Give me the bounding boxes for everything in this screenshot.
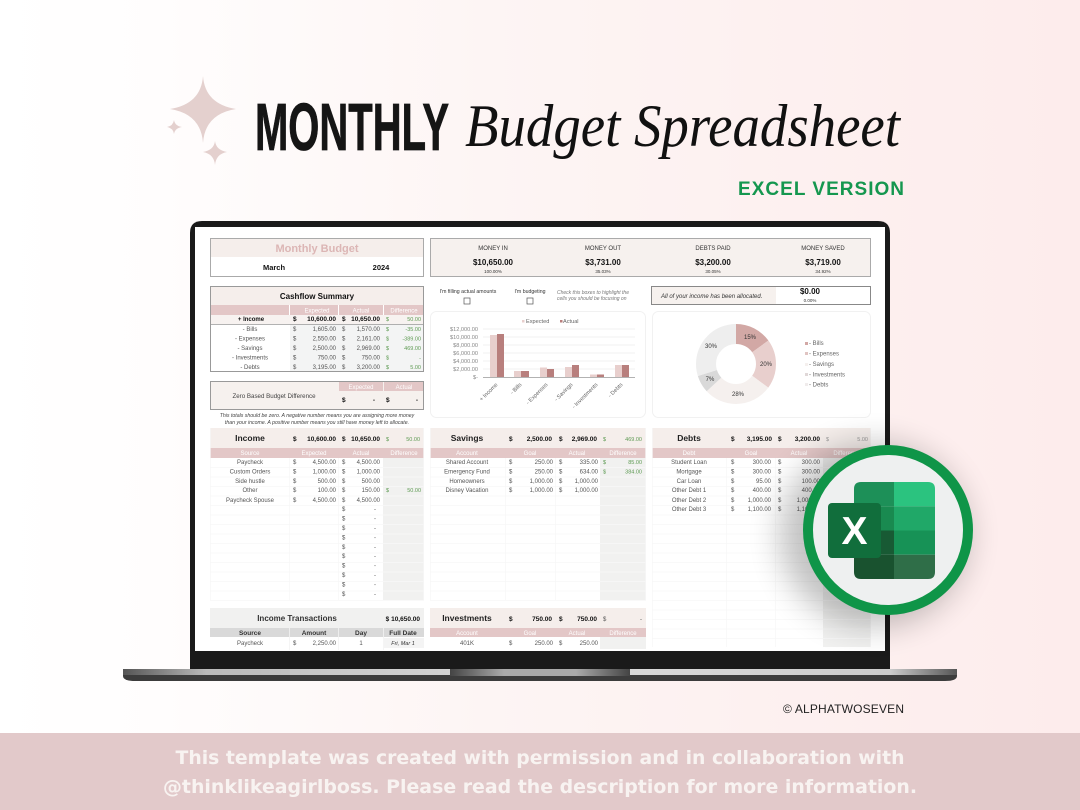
panel: cashflow summary: $: [386, 336, 389, 342]
panel: income: Paycheck Spouse: [226, 498, 275, 504]
panel: debts: $: [731, 488, 735, 494]
panel: savings: Actual: [569, 451, 585, 457]
panel: income: $: [342, 573, 346, 579]
panel: savings: Shared Account: [446, 460, 489, 466]
panel: view toggles: Check this boxes to highlight the: [557, 290, 629, 296]
panel: cashflow summary: $: [386, 365, 389, 371]
panel: income transactions: $ 10,650.00: [386, 616, 420, 623]
panel: debts: $: [778, 507, 782, 513]
copyright credit: © ALPHATWOSEVEN: [783, 702, 904, 716]
panel: debts: 1,000.00: [748, 498, 772, 504]
laptop bezel: [190, 221, 890, 670]
panel: savings: Disney Vacation: [446, 488, 488, 494]
panel: income: 4,500.00: [357, 460, 381, 466]
panel: cashflow summary: $: [386, 317, 389, 323]
panel: debts: $: [778, 460, 782, 466]
panel: debts: Difference: [833, 451, 861, 457]
panel: savings: 85.00: [628, 460, 642, 466]
panel: savings: 634.00: [580, 470, 599, 476]
panel: KPI summary: 34.92%: [815, 269, 831, 274]
panel: savings: 1,000.00: [575, 479, 599, 485]
bar chart: expected vs actual: - Investments: [571, 382, 600, 410]
laptop: [123, 221, 957, 681]
panel: savings: [430, 428, 646, 600]
panel: income: 500.00: [362, 479, 381, 485]
panel: income: $: [342, 507, 346, 513]
panel: income: -: [374, 507, 376, 513]
panel: investments: $: [603, 617, 607, 623]
panel: income: Actual: [353, 451, 369, 457]
panel: savings: Difference: [609, 451, 637, 457]
panel: cashflow summary: $: [293, 336, 297, 342]
panel: cashflow summary: Expected: [304, 308, 330, 314]
panel: cashflow summary: 1,570.00: [357, 327, 381, 333]
panel: zero based budget difference: -: [416, 397, 418, 404]
panel: month header: March: [263, 263, 285, 272]
bar chart: expected vs actual: - Debts: [607, 382, 625, 399]
panel: KPI summary: $3,719.00: [805, 258, 841, 267]
panel: cashflow summary: $: [342, 346, 346, 352]
panel: income: 10,650.00: [351, 436, 380, 443]
panel: income: 4,500.00: [357, 498, 381, 504]
panel: income transactions: Full Date: [389, 630, 417, 637]
panel: debts: $: [778, 470, 782, 476]
panel: income transactions: [210, 608, 424, 650]
panel: savings: 2,500.00: [527, 436, 552, 443]
panel: debts: 1,100.00: [748, 507, 772, 513]
panel: income transactions: Source: [239, 630, 261, 637]
panel: cashflow summary: $: [293, 316, 297, 323]
panel: month header: Monthly Budget: [275, 243, 359, 255]
panel: income: 1,000.00: [357, 470, 381, 476]
panel: debts: 400.00: [753, 488, 772, 494]
panel: zero based budget difference: Zero Based Budget Difference: [232, 393, 316, 400]
panel: income: Source: [240, 451, 260, 457]
footer band: This template was created with permission and in collaboration with: [176, 747, 904, 769]
subtitle: excel version: EXCEL VERSION: [738, 179, 904, 200]
panel: income: [210, 428, 424, 600]
bar chart: expected vs actual: $-: [473, 375, 478, 381]
panel: income: $: [386, 437, 389, 443]
panel: income: $: [293, 488, 297, 494]
panel: view toggles: cells you should be focusing on: [557, 296, 627, 302]
panel: KPI summary: $3,200.00: [695, 258, 731, 267]
legend: Actual: [563, 319, 579, 325]
panel: savings: $: [559, 470, 563, 476]
panel: debts: $: [826, 437, 829, 443]
panel: cashflow summary: -35.00: [405, 327, 421, 333]
panel: savings: $: [509, 460, 513, 466]
bar chart: expected vs actual: $8,000.00: [453, 343, 478, 349]
bar chart: expected vs actual: $2,000.00: [453, 367, 478, 373]
panel: debts: 100.00: [802, 479, 821, 485]
panel: debts: $: [731, 498, 735, 504]
panel: view toggles: I'm budgeting: [515, 289, 546, 295]
panel: cashflow summary: - Debts: [240, 365, 260, 371]
panel: income: $: [293, 436, 297, 443]
panel: savings: $: [603, 437, 606, 443]
panel: investments: 250.00: [535, 641, 554, 647]
title: MONTHLY: [255, 90, 449, 165]
panel: savings: $: [559, 460, 563, 466]
panel: savings: 469.00: [625, 437, 642, 443]
panel: cashflow summary: 469.00: [404, 346, 421, 352]
panel: cashflow summary: - Investments: [232, 356, 268, 362]
panel: debts: Mortgage: [676, 470, 702, 476]
title: Budget Spreadsheet: [465, 93, 901, 159]
panel: zero based budget difference: [210, 382, 424, 410]
panel: savings: $: [509, 488, 513, 494]
panel: investments: Investments: [442, 613, 492, 623]
panel: zero based budget difference: $: [342, 397, 346, 404]
panel: savings: $: [603, 460, 606, 466]
legend: - Investments: [809, 372, 845, 378]
panel: KPI summary: DEBTS PAID: [695, 246, 731, 252]
panel: savings: $: [509, 479, 513, 485]
panel: savings: 384.00: [625, 470, 642, 476]
panel: income: $: [342, 526, 346, 532]
legend: - Expenses: [809, 352, 839, 358]
panel: cashflow summary: 2,161.00: [357, 336, 381, 342]
panel: income: $: [342, 479, 346, 485]
panel: debts: 3,200.00: [795, 436, 820, 443]
panel: cashflow summary: Difference: [390, 308, 418, 314]
panel: income transactions: 1: [359, 641, 363, 647]
panel: income: -: [374, 526, 376, 532]
panel: income: 100.00: [318, 488, 337, 494]
panel: income: -: [374, 573, 376, 579]
panel: cashflow summary: 50.00: [407, 317, 421, 323]
panel: cashflow summary: - Savings: [237, 346, 263, 352]
panel: income: $: [342, 436, 346, 443]
panel: KPI summary: 100.00%: [484, 269, 502, 274]
panel: income: Difference: [390, 451, 418, 457]
panel: savings: 335.00: [580, 460, 599, 466]
panel: savings: 1,000.00: [530, 479, 554, 485]
panel: cashflow summary: 2,969.00: [357, 346, 381, 352]
icon: excel X tile: [828, 503, 881, 558]
panel: cashflow summary: -: [419, 356, 421, 362]
panel: investments: $: [509, 616, 513, 623]
panel: cashflow summary: 3,195.00: [313, 365, 337, 371]
donut chart: spending share: [652, 312, 870, 418]
panel: income: $: [342, 536, 346, 542]
panel: debts: Goal: [745, 451, 757, 457]
panel: income: $: [342, 488, 346, 494]
panel: savings: $: [559, 479, 563, 485]
panel: savings: Savings: [451, 433, 484, 443]
donut chart: spending share: 20%: [760, 362, 773, 368]
legend: - Debts: [809, 382, 828, 388]
panel: KPI summary: MONEY OUT: [585, 246, 621, 252]
panel: allocation status: $0.00: [800, 287, 821, 296]
panel: savings: 2,969.00: [572, 436, 597, 443]
panel: income: 50.00: [407, 488, 421, 494]
panel: income: -: [374, 592, 376, 598]
donut chart: spending share: 28%: [732, 392, 745, 398]
panel: cashflow summary: - Bills: [243, 327, 257, 333]
panel: income transactions: Paycheck: [237, 641, 264, 647]
panel: month header: [210, 238, 424, 276]
panel: income: $: [293, 470, 297, 476]
panel: debts: $: [731, 470, 735, 476]
legend: - Bills: [809, 341, 824, 347]
panel: debts: 1,000.00: [797, 498, 821, 504]
panel: income transactions: Income Transactions: [257, 614, 337, 623]
panel: cashflow summary: Cashflow Summary: [280, 292, 355, 301]
panel: income: $: [342, 460, 346, 466]
bar chart: expected vs actual: - Savings: [554, 382, 575, 403]
panel: KPI summary: MONEY SAVED: [801, 246, 845, 252]
panel: savings: 250.00: [535, 470, 554, 476]
panel: income: 500.00: [318, 479, 337, 485]
panel: cashflow summary: $: [342, 327, 346, 333]
panel: cashflow summary: $: [386, 356, 389, 362]
note: zero based explanation: This totals should be zero. A negative number means you are assigning more money: [220, 413, 415, 419]
panel: cashflow summary: [210, 286, 424, 372]
panel: cashflow summary: 1,605.00: [313, 327, 337, 333]
panel: income: 10,600.00: [307, 436, 336, 443]
panel: debts: $: [778, 498, 782, 504]
panel: income: $: [342, 592, 346, 598]
panel: income: 50.00: [406, 437, 420, 443]
panel: zero based budget difference: Actual: [396, 385, 412, 391]
panel: debts: Student Loan: [671, 460, 707, 466]
footer band: [0, 733, 1080, 810]
panel: KPI summary: 35.03%: [595, 269, 611, 274]
panel: investments: $: [559, 616, 563, 623]
laptop screen: [195, 227, 885, 651]
panel: investments: Actual: [569, 631, 585, 637]
panel: investments: Difference: [609, 631, 637, 637]
panel: investments: Account: [456, 631, 478, 637]
legend: Expected: [526, 319, 549, 325]
panel: KPI summary: [430, 238, 870, 276]
panel: cashflow summary: $: [342, 316, 346, 323]
laptop base: [123, 669, 957, 681]
panel: investments: $: [509, 641, 513, 647]
footer band: @thinklikeagirlboss. Please read the description for more information.: [163, 776, 917, 798]
panel: debts: Debt: [683, 451, 696, 457]
donut chart: spending share: 30%: [705, 344, 718, 350]
panel: savings: $: [509, 470, 513, 476]
panel: cashflow summary: $: [386, 327, 389, 333]
panel: KPI summary: 30.05%: [705, 269, 721, 274]
panel: income transactions: Amount: [302, 630, 327, 637]
panel: cashflow summary: 3,200.00: [357, 365, 381, 371]
legend: [522, 319, 579, 325]
panel: income: $: [342, 470, 346, 476]
bar chart: expected vs actual: $10,000.00: [450, 335, 478, 341]
bar chart: expected vs actual: $6,000.00: [453, 351, 478, 357]
panel: income: Paycheck: [237, 460, 264, 466]
panel: cashflow summary: $: [293, 356, 297, 362]
panel: view toggles: I'm filling actual amounts: [440, 289, 497, 295]
donut chart: spending share: 15%: [744, 335, 757, 341]
panel: investments: $: [559, 641, 563, 647]
panel: cashflow summary: $: [342, 336, 346, 342]
bar chart: expected vs actual: [430, 312, 646, 418]
panel: zero based budget difference: -: [373, 397, 375, 404]
panel: cashflow summary: 2,500.00: [313, 346, 337, 352]
panel: debts: Actual: [791, 451, 807, 457]
panel: zero based budget difference: Expected: [348, 385, 374, 391]
panel: income transactions: $: [293, 641, 297, 647]
panel: cashflow summary: 750.00: [362, 356, 381, 362]
panel: debts: $: [778, 436, 782, 443]
panel: KPI summary: $3,731.00: [585, 258, 621, 267]
panel: income: -: [374, 516, 376, 522]
panel: income: $: [342, 498, 346, 504]
panel: allocation status: [652, 286, 870, 304]
panel: month header: 2024: [373, 263, 390, 272]
panel: income: -: [374, 536, 376, 542]
panel: investments: Goal: [524, 631, 536, 637]
panel: cashflow summary: $: [293, 346, 297, 352]
icon: sparkles: [167, 76, 236, 165]
panel: income: $: [342, 554, 346, 560]
panel: cashflow summary: -389.00: [402, 336, 421, 342]
panel: allocation status: 0.00%: [804, 298, 816, 303]
panel: income: 4,500.00: [313, 460, 337, 466]
panel: debts: 300.00: [802, 460, 821, 466]
panel: debts: Car Loan: [677, 479, 701, 485]
legend: [805, 341, 845, 388]
panel: cashflow summary: 5.00: [410, 365, 421, 371]
bar chart: expected vs actual: $12,000.00: [450, 327, 478, 333]
panel: debts: Other Debt 3: [672, 507, 707, 513]
panel: income: Expected: [301, 451, 327, 457]
panel: debts: $: [778, 479, 782, 485]
bar chart: expected vs actual: - Bills: [509, 382, 524, 396]
panel: income: 150.00: [362, 488, 381, 494]
panel: income: $: [342, 564, 346, 570]
panel: debts: 95.00: [756, 479, 772, 485]
panel: cashflow summary: 10,650.00: [351, 316, 380, 323]
panel: investments: 401K: [460, 641, 474, 647]
bar chart: expected vs actual: $4,000.00: [453, 359, 478, 365]
panel: KPI summary: $10,650.00: [473, 258, 514, 267]
bar chart: expected vs actual: - Expenses: [525, 382, 550, 406]
panel: debts: 400.00: [802, 488, 821, 494]
panel: cashflow summary: 2,550.00: [313, 336, 337, 342]
panel: debts: $: [778, 488, 782, 494]
panel: investments: 250.00: [580, 641, 599, 647]
panel: income: -: [374, 545, 376, 551]
panel: debts: Other Debt 2: [672, 498, 707, 504]
panel: investments: -: [640, 617, 642, 623]
panel: savings: $: [509, 436, 513, 443]
panel: debts: $: [731, 460, 735, 466]
panel: cashflow summary: 750.00: [318, 356, 337, 362]
panel: income: Income: [235, 433, 265, 443]
icon: excel badge: [780, 443, 968, 627]
panel: debts: $: [731, 436, 735, 443]
panel: income: $: [342, 516, 346, 522]
panel: cashflow summary: - Expenses: [235, 336, 265, 342]
panel: debts: 3,195.00: [747, 436, 772, 443]
panel: income: $: [293, 479, 297, 485]
note: zero based explanation: than your income. A positive number means you still have money left to allocate.: [225, 420, 409, 426]
panel: debts: $: [731, 507, 735, 513]
panel: income transactions: Fri, Mar 1: [391, 641, 415, 647]
note: zero based explanation: [220, 413, 415, 426]
panel: savings: 1,000.00: [575, 488, 599, 494]
panel: income: 1,000.00: [313, 470, 337, 476]
panel: cashflow summary: $: [293, 365, 297, 371]
panel: debts: 300.00: [753, 460, 772, 466]
panel: debts: 1,100.00: [797, 507, 821, 513]
panel: income: $: [386, 488, 389, 494]
panel: cashflow summary: $: [342, 356, 346, 362]
panel: income: -: [374, 564, 376, 570]
panel: income: $: [342, 582, 346, 588]
icon: excel sheet: [854, 482, 935, 579]
panel: investments: 750.00: [577, 616, 597, 623]
panel: cashflow summary: + Income: [238, 317, 265, 323]
panel: income: -: [374, 582, 376, 588]
panel: savings: $: [559, 436, 563, 443]
panel: income: Custom Orders: [230, 470, 270, 476]
panel: view toggles: [440, 289, 629, 304]
bar chart: expected vs actual: + Income: [479, 382, 499, 403]
panel: savings: Account: [456, 451, 478, 457]
panel: income: Side hustle: [235, 479, 266, 485]
panel: zero based budget difference: $: [386, 397, 390, 404]
panel: debts: Other Debt 1: [672, 488, 707, 494]
legend: - Savings: [809, 362, 834, 368]
panel: income: $: [342, 545, 346, 551]
icon: excel X tile: X: [841, 510, 868, 553]
panel: KPI summary: MONEY IN: [478, 246, 508, 252]
panel: savings: 250.00: [535, 460, 554, 466]
panel: cashflow summary: $: [342, 365, 346, 371]
panel: savings: Emergency Fund: [444, 470, 490, 476]
donut chart: spending share: 7%: [706, 377, 715, 383]
title: [255, 90, 901, 165]
panel: income: $: [293, 460, 297, 466]
panel: debts: $: [731, 479, 735, 485]
panel: investments: [430, 608, 646, 649]
panel: debts: 300.00: [753, 470, 772, 476]
panel: income transactions: Day: [355, 630, 367, 637]
panel: savings: Goal: [524, 451, 536, 457]
panel: debts: Debts: [677, 433, 701, 443]
panel: income: 4,500.00: [313, 498, 337, 504]
panel: savings: 1,000.00: [530, 488, 554, 494]
panel: income: $: [293, 498, 297, 504]
panel: savings: $: [559, 488, 563, 494]
panel: cashflow summary: 10,600.00: [307, 316, 336, 323]
panel: savings: Homeowners: [449, 479, 485, 485]
panel: savings: $: [603, 470, 606, 476]
panel: cashflow summary: $: [386, 346, 389, 352]
panel: debts: [652, 428, 871, 647]
panel: debts: 5.00: [857, 437, 868, 443]
panel: income: Other: [242, 488, 258, 494]
panel: cashflow summary: Actual: [353, 308, 369, 314]
panel: income: -: [374, 554, 376, 560]
panel: investments: 750.00: [532, 616, 552, 623]
panel: income transactions: 2,250.00: [313, 641, 337, 647]
panel: allocation status: All of your income has been allocated.: [660, 294, 762, 300]
panel: cashflow summary: $: [293, 327, 297, 333]
panel: debts: 300.00: [802, 470, 821, 476]
